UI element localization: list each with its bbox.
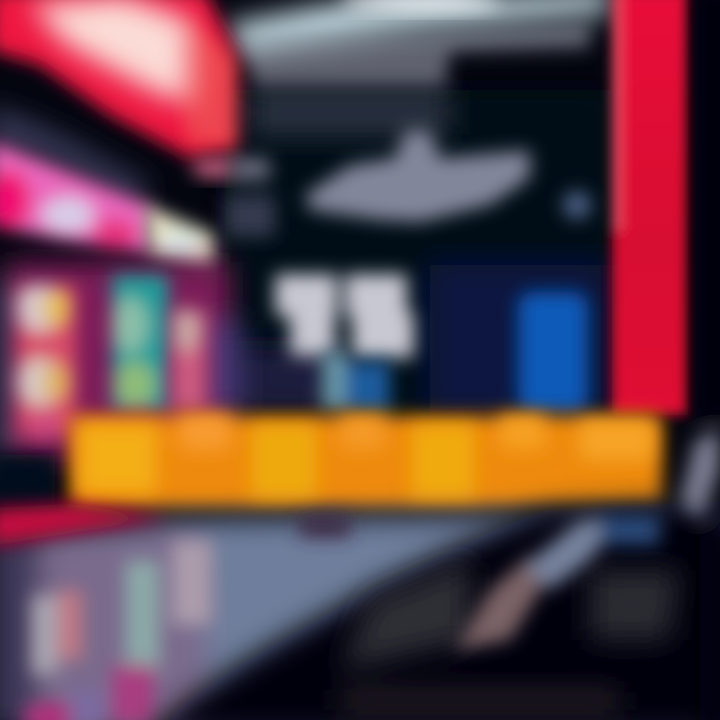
panel: shop window columns	[0, 262, 240, 510]
panel: blue block	[518, 292, 588, 412]
column: teal	[112, 275, 168, 410]
large blurred letters	[275, 274, 414, 358]
cream end of strip	[145, 205, 215, 272]
panel: magenta shop strip	[0, 105, 215, 272]
sign pale glow	[30, 0, 190, 105]
tile highlights	[80, 415, 652, 497]
grey road patch	[340, 560, 680, 712]
panel: orange tile row	[70, 415, 662, 508]
panel: red pillar	[612, 0, 688, 415]
panel: red sign	[0, 0, 239, 178]
grey signage block	[240, 24, 590, 86]
dark foreground wedge	[150, 500, 720, 720]
blue haze above strip	[0, 105, 150, 205]
small blue glow	[322, 352, 390, 412]
sign lower pink edge	[191, 158, 239, 178]
dark lower-left corner	[0, 455, 55, 510]
panel: reflective floor	[0, 500, 720, 720]
floor reflections	[22, 515, 350, 720]
column: yellow and pink	[16, 284, 76, 440]
grey upper wall	[250, 90, 450, 135]
dark centre wall	[225, 90, 610, 420]
column: pink cream	[172, 308, 206, 410]
bright band	[225, 0, 610, 50]
band highlight	[340, 0, 500, 11]
mauve to blue streak	[455, 515, 660, 650]
red kerb	[0, 504, 170, 546]
panel: top light band	[225, 0, 610, 135]
blurred headline blobs	[225, 130, 591, 237]
right dark edge	[680, 0, 720, 720]
